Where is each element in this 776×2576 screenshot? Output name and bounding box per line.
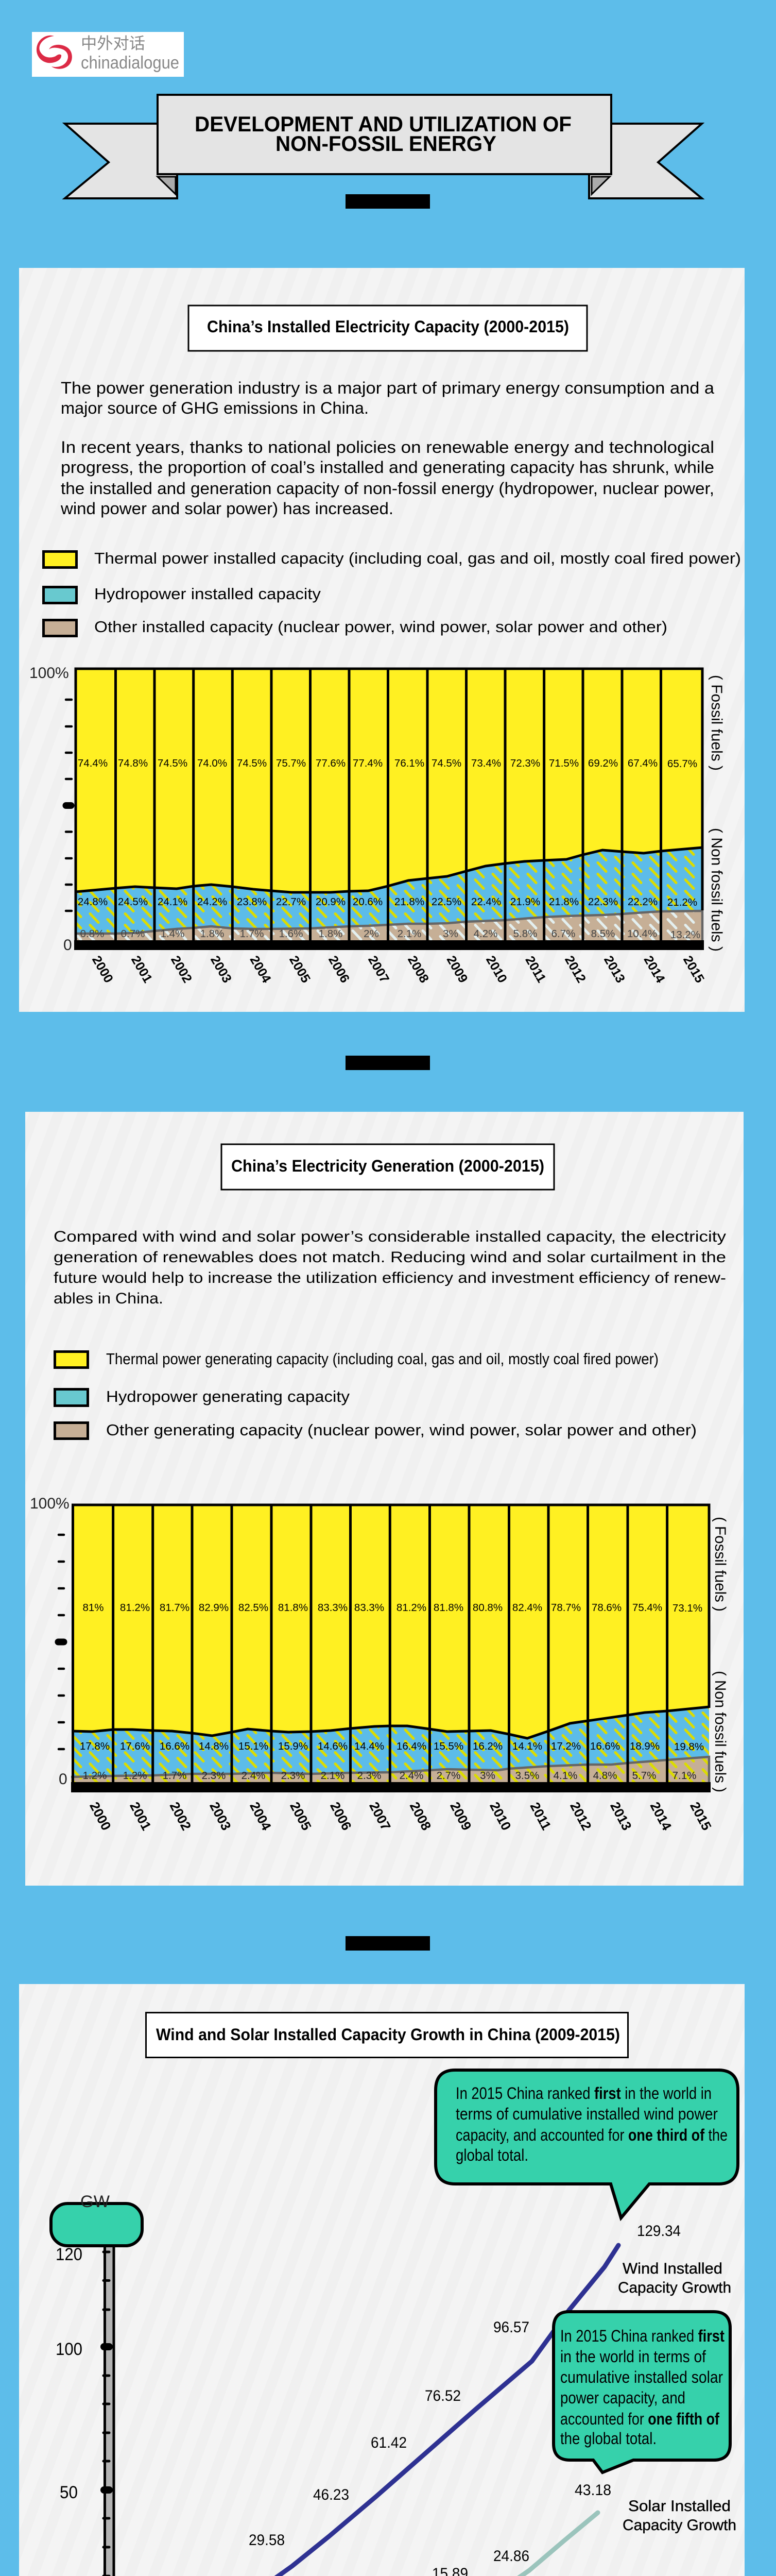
hydropower values: 17.8% — [80, 1740, 110, 1752]
x axis years: 2014 — [641, 953, 668, 986]
panel: electricity generation — [25, 1112, 744, 1886]
thermal values: 65.7% — [667, 758, 697, 770]
x axis years: 2008 — [407, 1799, 434, 1833]
thermal values: 74.0% — [197, 757, 227, 769]
thermal values: 80.8% — [473, 1602, 503, 1614]
x axis years: 2001 — [127, 1799, 154, 1833]
x axis years: 2007 — [365, 953, 392, 986]
solar values — [177, 2482, 611, 2576]
series label: wind: Capacity Growth — [618, 2279, 731, 2296]
x axis years: 2006 — [327, 1799, 355, 1833]
wind values: 61.42 — [371, 2434, 407, 2451]
hydropower values: 20.6% — [353, 896, 383, 908]
x axis years — [87, 1799, 715, 1833]
thermal values: 82.4% — [512, 1602, 542, 1614]
thermal values: 69.2% — [588, 757, 618, 769]
x axis years: 2010 — [487, 1799, 514, 1833]
x axis years: 2011 — [522, 954, 549, 985]
other values: 1.8% — [319, 928, 342, 940]
hydropower values: 21.8% — [549, 896, 579, 908]
hydropower values: 16.6% — [160, 1740, 189, 1752]
side labels: fossil and non fossil: ( Non fossil fuels ) — [712, 1671, 729, 1792]
heading: electricity generation: China’s Electricity Generation (2000-2015) — [231, 1157, 544, 1175]
unit box: GW: GW — [80, 2192, 110, 2211]
thermal values: 74.8% — [118, 757, 148, 769]
solar capacity line — [115, 2513, 598, 2576]
wind capacity line — [115, 2245, 618, 2576]
other values: 2.1% — [321, 1770, 344, 1782]
y axis labels — [30, 1495, 70, 1788]
other values — [83, 1770, 696, 1782]
thermal values: 73.1% — [672, 1602, 702, 1614]
solar values: 43.18 — [575, 2482, 611, 2499]
hydropower values: 14.4% — [354, 1740, 384, 1752]
other values: 2.1% — [398, 928, 421, 940]
y axis ticks — [58, 1535, 64, 1749]
x axis years: 2012 — [567, 1799, 595, 1833]
hydropower values: 20.9% — [316, 896, 346, 908]
series label: wind — [618, 2260, 731, 2296]
intro text — [60, 379, 714, 518]
other values: 0.7% — [121, 928, 145, 940]
series label: wind: Wind Installed — [623, 2260, 722, 2277]
thermal values: 78.7% — [551, 1602, 581, 1614]
hydropower values: 21.8% — [394, 896, 424, 908]
hydropower values: 14.1% — [512, 1740, 542, 1752]
other values: 4.1% — [554, 1770, 577, 1782]
x axis years — [89, 953, 707, 986]
solar values: 24.86 — [493, 2548, 529, 2565]
thermal values: 74.5% — [158, 757, 187, 769]
thermal values: 82.5% — [238, 1602, 268, 1614]
thermal values: 74.5% — [432, 757, 461, 769]
callout: wind ranking: In 2015 China ranked first in the world in — [456, 2084, 712, 2103]
other values: 2.7% — [437, 1770, 460, 1782]
thermal values: 81.2% — [396, 1602, 426, 1614]
thermal values: 81.7% — [160, 1602, 189, 1614]
heading: wind and solar: Wind and Solar Installed Capacity Growth in China (2009-2015) — [156, 2025, 620, 2044]
hydropower values: 17.6% — [120, 1740, 150, 1752]
y axis labels: 100% — [29, 665, 69, 682]
legend: Hydropower installed capacity — [94, 585, 321, 603]
hydropower values: 22.5% — [432, 896, 461, 908]
thermal values: 76.1% — [394, 757, 424, 769]
hydropower values: 24.2% — [197, 896, 227, 908]
side labels: fossil and non fossil — [708, 675, 725, 952]
other values: 2% — [364, 928, 379, 940]
other values: 1.2% — [123, 1770, 147, 1782]
wind values: 46.23 — [313, 2486, 349, 2503]
thermal values: 81.8% — [278, 1602, 308, 1614]
callout: wind ranking: terms of cumulative installed wind power — [456, 2105, 718, 2123]
hydropower values: 16.6% — [590, 1740, 620, 1752]
thermal values: 82.9% — [199, 1602, 229, 1614]
y axis — [104, 2246, 114, 2576]
divider bar 3 — [346, 1936, 430, 1951]
legend: Other installed capacity (nuclear power, wind power, solar power and other) — [94, 618, 667, 636]
side labels: fossil and non fossil: ( Non fossil fuels ) — [708, 828, 725, 952]
intro text: the installed and generation capacity of non-fossil energy (hydropower, nuclear power, — [61, 479, 714, 498]
hydropower values: 22.3% — [588, 896, 618, 908]
side labels: fossil and non fossil: ( Fossil fuels ) — [708, 675, 725, 771]
series label: solar: Capacity Growth — [623, 2517, 736, 2534]
hydropower values: 22.4% — [471, 896, 501, 908]
other values: 10.4% — [627, 928, 657, 940]
hydropower values: 19.8% — [674, 1741, 704, 1753]
other values: 1.8% — [200, 928, 224, 940]
other values: 4.8% — [593, 1770, 617, 1782]
x axis years: 2000 — [87, 1799, 114, 1833]
y axis labels — [56, 2245, 82, 2576]
intro text: generation of renewables does not match. Reducing wind and solar curtailment in the — [54, 1249, 726, 1266]
other values: 4.2% — [474, 928, 497, 940]
thermal values: 81% — [82, 1602, 104, 1614]
other values: 2.3% — [202, 1770, 226, 1782]
legend: Thermal power installed capacity (including coal, gas and oil, mostly coal fired power) — [94, 549, 741, 567]
legend — [55, 1350, 697, 1439]
hydropower values: 23.8% — [237, 896, 267, 908]
other values: 3% — [443, 928, 458, 940]
x axis years: 2015 — [680, 953, 707, 986]
callout: wind ranking: global total. — [456, 2146, 528, 2164]
hydropower values: 21.9% — [510, 896, 540, 908]
x axis years: 2015 — [687, 1799, 715, 1833]
other values: 0.8% — [80, 928, 104, 940]
callout: solar ranking: in the world in terms of — [560, 2347, 706, 2366]
divider bar 1 — [346, 194, 430, 209]
x axis years: 2005 — [286, 953, 313, 986]
x axis years: 2002 — [167, 1799, 194, 1833]
hydropower values: 22.2% — [628, 896, 658, 908]
x axis years: 2002 — [168, 953, 195, 986]
callout: solar ranking: power capacity, and — [560, 2388, 685, 2407]
series label: solar — [623, 2498, 736, 2534]
x axis years: 2004 — [247, 953, 274, 986]
hydropower values: 22.7% — [276, 896, 306, 908]
thermal values: 77.6% — [316, 757, 346, 769]
y axis labels: 100 — [56, 2340, 82, 2359]
logo: chinadialogue: chinadialogue — [81, 53, 179, 73]
other values: 1.7% — [163, 1770, 186, 1782]
other values: 2.3% — [281, 1770, 305, 1782]
other values — [80, 928, 700, 941]
hydropower values: 16.2% — [473, 1740, 503, 1752]
x axis years: 2014 — [647, 1799, 675, 1833]
unit box: GW — [51, 2192, 142, 2246]
intro text: In recent years, thanks to national policies on renewable energy and technological — [61, 438, 714, 456]
logo: chinadialogue — [32, 32, 184, 77]
callout: solar ranking — [554, 2312, 730, 2472]
hydropower values: 15.5% — [434, 1740, 463, 1752]
x axis years: 2007 — [366, 1799, 394, 1833]
legend: Thermal power generating capacity (including coal, gas and oil, mostly coal fired power) — [106, 1350, 659, 1368]
x axis years: 2006 — [325, 953, 352, 986]
thermal values: 81.2% — [120, 1602, 150, 1614]
callout: solar ranking: In 2015 China ranked first — [560, 2327, 725, 2345]
other values: 2.4% — [400, 1770, 423, 1782]
side labels: fossil and non fossil: ( Fossil fuels ) — [712, 1517, 729, 1612]
intro text: Compared with wind and solar power’s considerable installed capacity, the electricity — [54, 1228, 726, 1245]
callout: wind ranking: capacity, and accounted for one third of the — [456, 2126, 728, 2144]
thermal values — [78, 757, 697, 770]
wind values — [184, 2223, 681, 2576]
heading: wind and solar — [146, 2012, 628, 2058]
intro text: wind power and solar power) has increased. — [60, 499, 393, 518]
divider bar 2 — [346, 1056, 430, 1070]
intro text — [54, 1228, 726, 1307]
hydropower values: 24.5% — [118, 896, 148, 908]
other values: 6.7% — [551, 928, 575, 940]
thermal values — [82, 1602, 702, 1614]
hydropower values: 15.1% — [238, 1740, 268, 1752]
hydropower values — [80, 1740, 704, 1753]
x axis years: 2001 — [128, 953, 155, 986]
x axis years: 2003 — [208, 953, 234, 986]
other values: 5.8% — [513, 928, 537, 940]
stacked area chart: electricity generation — [30, 1495, 729, 1833]
hydropower values: 24.1% — [158, 896, 187, 908]
other values: 1.6% — [279, 928, 303, 940]
x axis years: 2010 — [483, 953, 510, 986]
y axis labels — [29, 665, 72, 954]
title banner: DEVELOPMENT AND UTILIZATION OF — [195, 112, 572, 136]
heading: electricity generation — [221, 1144, 554, 1190]
y axis ticks — [66, 700, 72, 911]
hydropower values: 24.8% — [78, 896, 108, 908]
callout: solar ranking: the global total. — [560, 2429, 657, 2448]
hydropower values: 17.2% — [551, 1740, 581, 1752]
other values: 8.5% — [591, 928, 615, 940]
side labels: fossil and non fossil — [712, 1517, 729, 1792]
other values: 3% — [480, 1770, 495, 1782]
thermal values: 72.3% — [510, 757, 540, 769]
x axis years: 2011 — [527, 1800, 554, 1833]
thermal values: 74.5% — [237, 757, 267, 769]
thermal values: 77.4% — [353, 757, 383, 769]
title banner: NON-FOSSIL ENERGY — [275, 131, 496, 156]
x axis years: 2009 — [444, 953, 471, 986]
legend: Other generating capacity (nuclear power, wind power, solar power and other) — [106, 1421, 697, 1439]
intro text: progress, the proportion of coal’s installed and generating capacity has shrunk, while — [61, 458, 714, 477]
intro text: The power generation industry is a major part of primary energy consumption and a — [61, 379, 714, 397]
hydropower values: 15.9% — [278, 1740, 308, 1752]
y axis labels: 0 — [59, 1771, 67, 1788]
thermal values: 67.4% — [628, 757, 658, 769]
hydropower values: 16.4% — [396, 1740, 426, 1752]
callout: wind ranking — [436, 2070, 738, 2218]
other values: 13.2% — [670, 929, 700, 941]
other values: 5.7% — [632, 1770, 656, 1782]
panel: wind and solar capacity growth — [19, 1984, 745, 2576]
intro text: ables in China. — [54, 1290, 163, 1307]
x axis years: 2005 — [287, 1799, 315, 1833]
y axis labels: 100% — [30, 1495, 70, 1512]
hydropower values: 14.6% — [318, 1740, 348, 1752]
thermal values: 73.4% — [471, 757, 501, 769]
x axis years: 2003 — [206, 1799, 234, 1833]
logo: chinadialogue: 中外对话 — [81, 35, 145, 53]
other values: 2.4% — [242, 1770, 265, 1782]
thermal values: 75.7% — [276, 757, 306, 769]
callout: solar ranking: cumulative installed solar — [560, 2368, 723, 2386]
legend — [43, 549, 741, 636]
series label: solar: Solar Installed — [628, 2498, 731, 2515]
legend: Hydropower generating capacity — [106, 1387, 350, 1405]
other values: 1.4% — [161, 928, 184, 940]
thermal values: 83.3% — [354, 1602, 384, 1614]
other values: 7.1% — [672, 1770, 696, 1782]
heading: installed capacity: China’s Installed Electricity Capacity (2000-2015) — [207, 317, 569, 336]
hydropower values: 18.9% — [630, 1740, 660, 1752]
hydropower values — [78, 896, 697, 908]
wind values: 129.34 — [637, 2223, 681, 2240]
title banner — [65, 95, 702, 198]
x axis years: 2012 — [562, 953, 589, 986]
other values: 3.5% — [515, 1770, 539, 1782]
wind values: 29.58 — [249, 2532, 285, 2549]
x axis years: 2013 — [601, 953, 628, 986]
wind values: 76.52 — [425, 2387, 461, 2404]
y axis labels: 50 — [60, 2483, 78, 2502]
stacked area chart: installed capacity — [29, 665, 725, 986]
thermal values: 74.4% — [78, 757, 108, 769]
intro text: future would help to increase the utilization efficiency and investment efficiency of renew- — [54, 1269, 726, 1286]
heading: installed capacity — [188, 306, 587, 351]
x axis years: 2004 — [247, 1799, 274, 1833]
callout: solar ranking: accounted for one fifth of — [560, 2410, 719, 2428]
other values: 1.2% — [83, 1770, 107, 1782]
y axis labels: 0 — [63, 937, 72, 954]
thermal values: 78.6% — [592, 1602, 622, 1614]
thermal values: 71.5% — [549, 757, 579, 769]
other values: 2.3% — [357, 1770, 381, 1782]
x axis years: 2008 — [405, 953, 432, 986]
thermal values: 83.3% — [318, 1602, 348, 1614]
other values: 1.7% — [240, 928, 264, 940]
panel: installed electricity capacity — [19, 268, 745, 1012]
x axis years: 2009 — [447, 1799, 475, 1833]
thermal values: 81.8% — [434, 1602, 463, 1614]
intro text: major source of GHG emissions in China. — [61, 399, 369, 417]
x axis years: 2000 — [89, 953, 116, 986]
hydropower values: 21.2% — [667, 896, 697, 908]
x axis years: 2013 — [607, 1799, 635, 1833]
wind values: 96.57 — [493, 2319, 529, 2336]
y axis labels: 120 — [56, 2245, 82, 2264]
line chart: wind and solar — [51, 2192, 736, 2576]
hydropower values: 14.8% — [199, 1740, 229, 1752]
thermal values: 75.4% — [632, 1602, 662, 1614]
